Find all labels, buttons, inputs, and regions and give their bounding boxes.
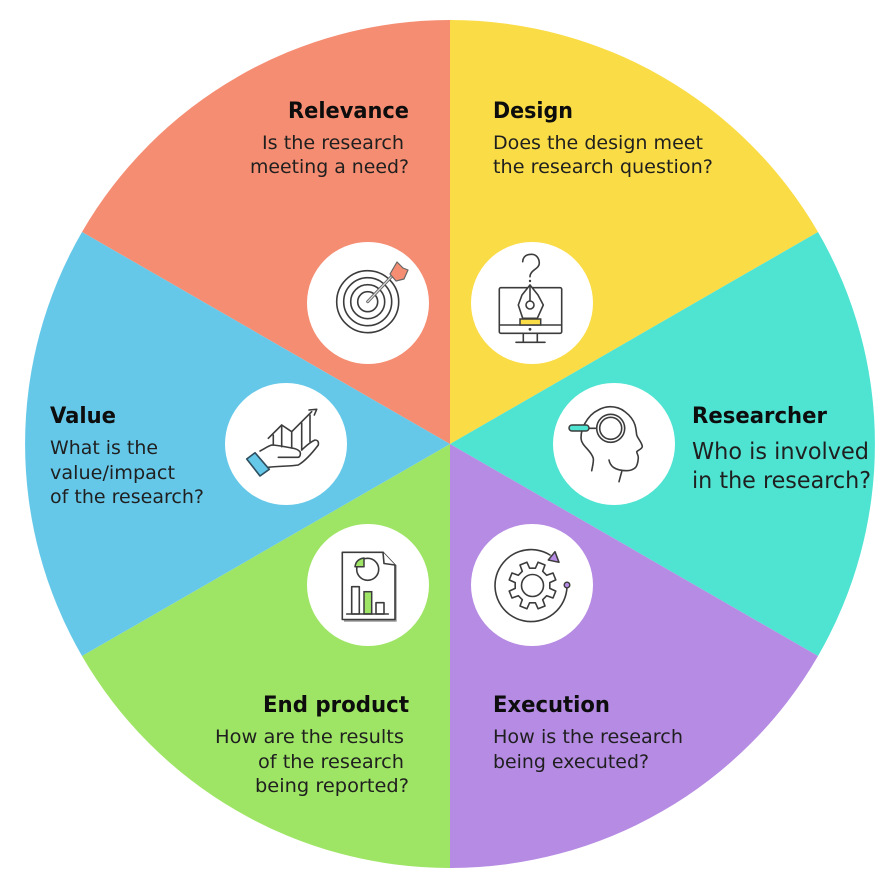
icon: pen nib on monitor with question mark (471, 242, 593, 364)
icon: target with arrow (307, 242, 429, 364)
value heading: Value (50, 404, 116, 429)
value question (50, 437, 204, 508)
design heading: Design (493, 99, 573, 124)
design question: the research question? (493, 156, 713, 178)
value question: value/impact (50, 462, 175, 484)
execution question (493, 726, 683, 773)
icon: head with magnifier (553, 383, 675, 505)
researcher question (692, 439, 871, 494)
panel: researcher sector (450, 232, 875, 656)
panel: end product sector (82, 444, 450, 868)
execution question: How is the research (493, 726, 683, 748)
value question: What is the (50, 437, 158, 459)
execution question: being executed? (493, 751, 649, 773)
execution heading: Execution (493, 693, 610, 718)
relevance question: meeting a need? (250, 156, 409, 178)
icon: hand holding rising chart (225, 383, 347, 505)
researcher question: in the research? (692, 468, 871, 494)
relevance question: Is the research (262, 132, 404, 154)
icon: end product document with charts (307, 524, 429, 646)
design question (493, 132, 713, 178)
panel: value sector (25, 232, 450, 656)
researcher question: Who is involved (692, 439, 869, 465)
value question: of the research? (50, 486, 204, 508)
relevance question (250, 132, 409, 178)
end product heading: End product (263, 693, 409, 718)
design question: Does the design meet (493, 132, 703, 154)
end product question: of the research (258, 751, 404, 773)
end product question (215, 726, 409, 797)
panel: design sector (450, 20, 818, 444)
end product question: How are the results (215, 726, 404, 748)
end product question: being reported? (255, 775, 409, 797)
icon: gear with circular arrow (471, 524, 593, 646)
panel: relevance sector (82, 20, 450, 444)
researcher heading: Researcher (692, 404, 827, 429)
relevance heading: Relevance (288, 99, 409, 124)
panel: execution sector (450, 444, 818, 868)
